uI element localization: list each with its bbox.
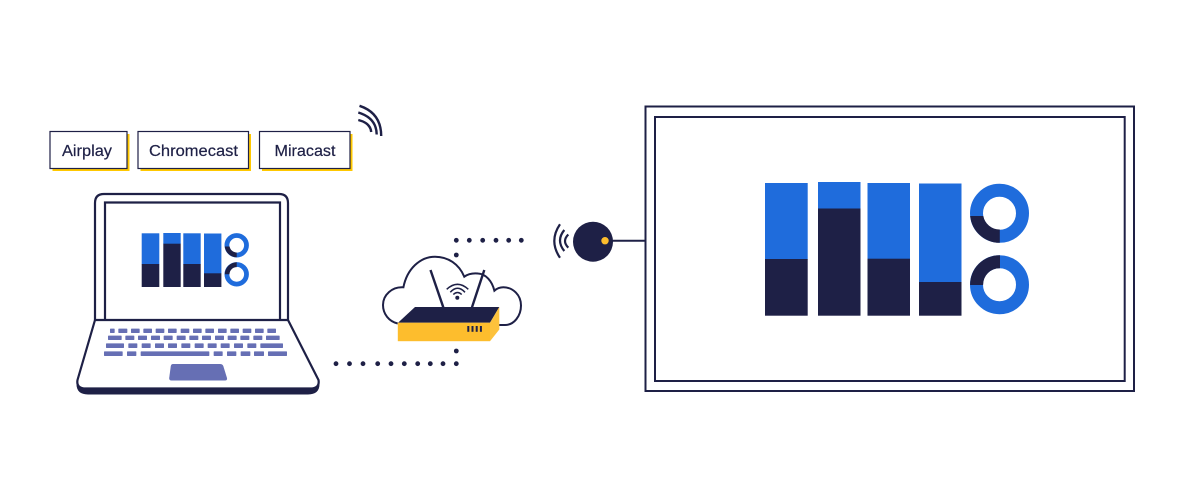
cloud (383, 257, 521, 325)
icon: wifi signal above tags (358, 106, 381, 136)
stacked bar 2 (818, 182, 860, 316)
keyboard (104, 329, 287, 356)
laptop screen (105, 202, 280, 320)
tag: Airplay: Airplay (62, 143, 112, 160)
dotted connection: laptop to router (334, 349, 459, 366)
antennas (430, 270, 484, 307)
laptop base (77, 320, 319, 388)
router vents (467, 326, 482, 332)
protocol tags (50, 132, 352, 171)
tag: Chromecast (138, 132, 251, 171)
router wifi symbol (447, 284, 468, 300)
donut chart 2 (970, 255, 1022, 308)
tag: Airplay (50, 132, 130, 171)
router top (398, 307, 499, 323)
stacked bar 3 (868, 183, 910, 316)
small donut 1 (225, 236, 246, 257)
laptop lid (95, 194, 288, 320)
stacked bar 4 (919, 184, 962, 316)
icon: receiver wireless signal (554, 224, 568, 258)
router (398, 270, 499, 341)
dotted connection: router to receiver (454, 238, 524, 257)
donut chart 1 (970, 190, 1022, 243)
router front (398, 323, 490, 341)
laptop base shadow (76, 383, 320, 394)
connector cable (610, 240, 645, 242)
small donut 2 (225, 262, 246, 284)
tag: Miracast (260, 132, 352, 171)
laptop (76, 194, 320, 394)
router side (490, 307, 499, 341)
tag: Miracast: Miracast (274, 143, 336, 160)
small stacked bars (142, 233, 221, 287)
wireless receiver dongle (573, 222, 613, 262)
display screen (646, 106, 1134, 391)
laptop screen chart (142, 233, 246, 287)
trackpad (169, 364, 227, 380)
stacked bar 1 (765, 183, 808, 316)
large display chart (765, 182, 1022, 316)
tag: Chromecast: Chromecast (149, 143, 239, 160)
